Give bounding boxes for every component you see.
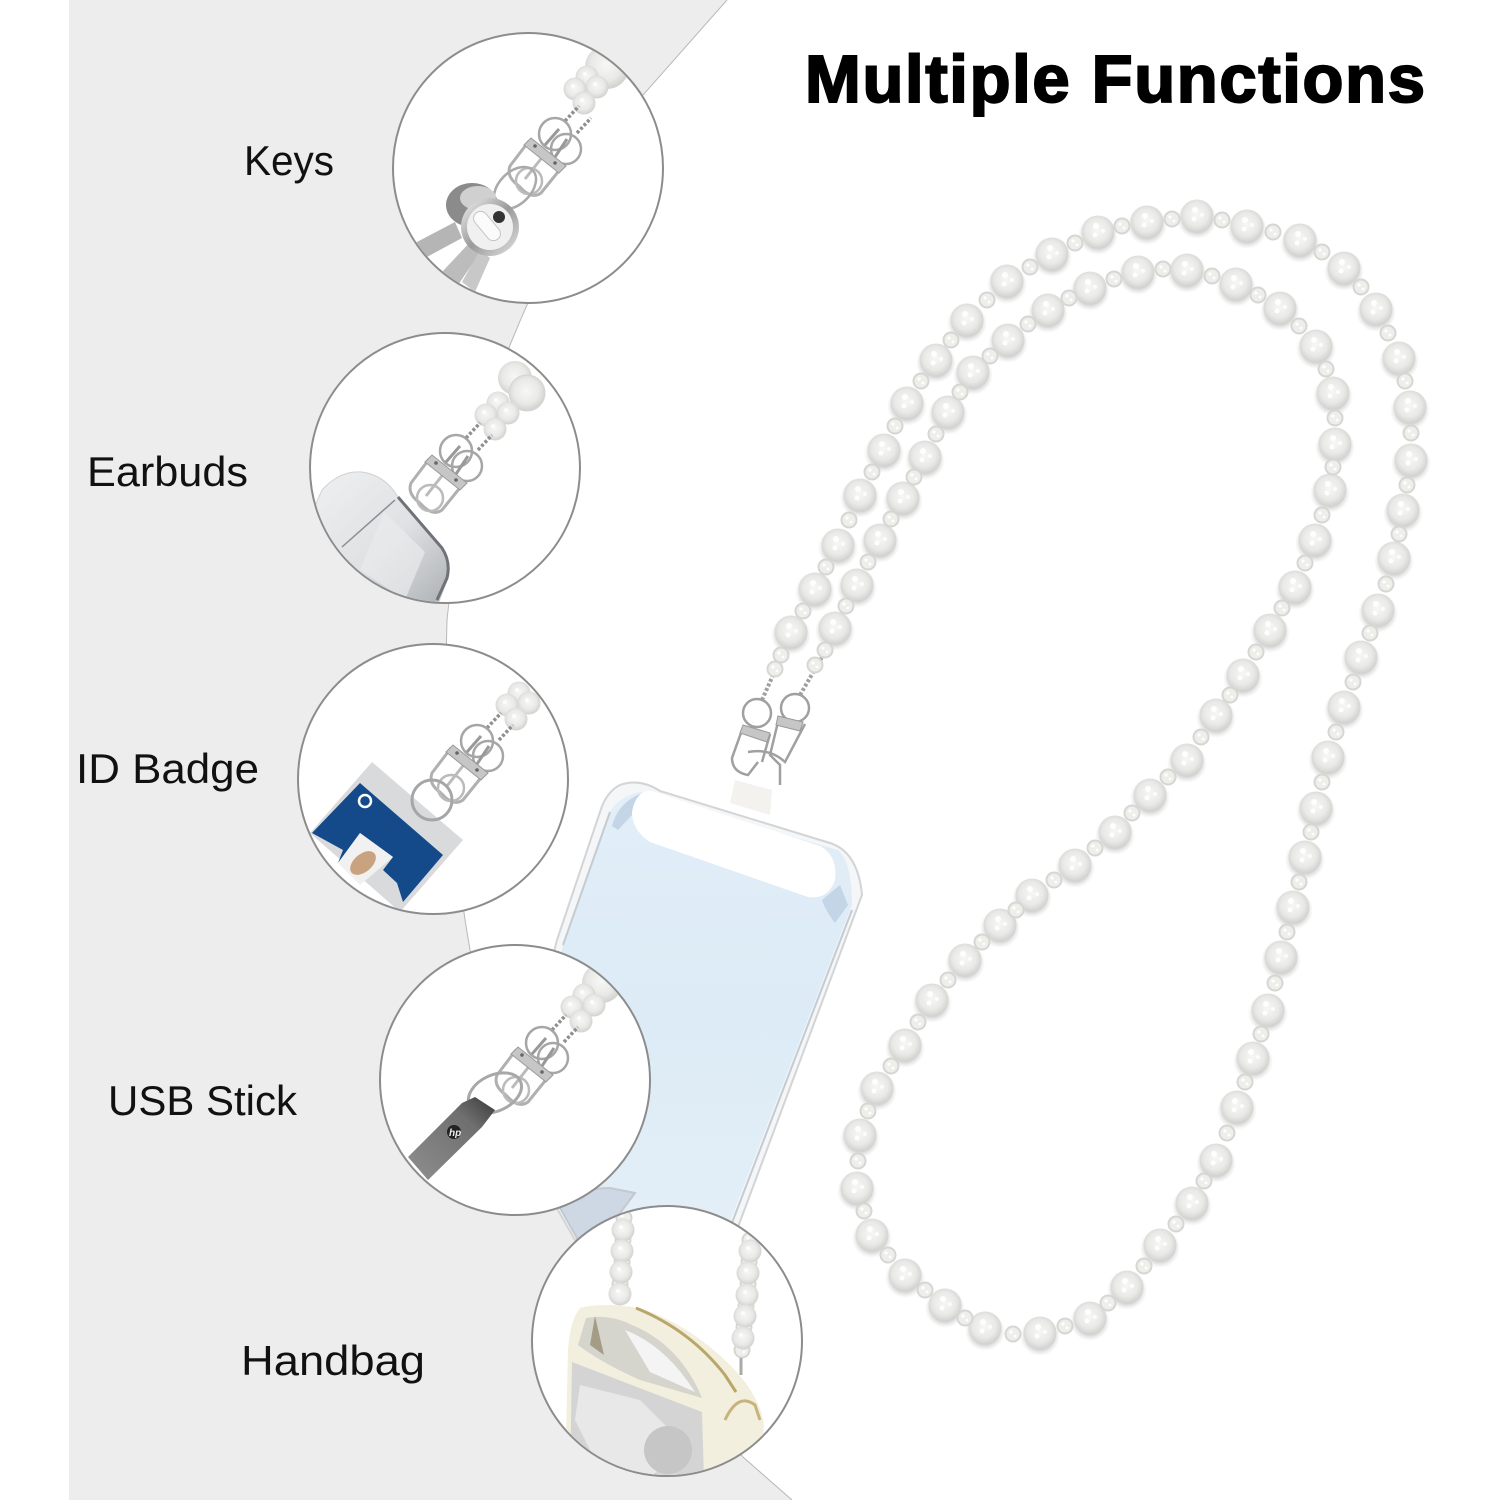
label: Keys: Keys — [244, 137, 334, 184]
icon: keys — [415, 183, 519, 292]
icon: USB stick — [408, 1097, 495, 1180]
circle: ID badge — [298, 644, 568, 914]
icon: USB stick: hp — [449, 1128, 461, 1139]
icon: earbuds case — [316, 471, 450, 602]
circle: keys — [393, 33, 663, 303]
metal swivel clasps on main strap — [732, 652, 825, 785]
circle: USB stick — [380, 945, 650, 1215]
phone tether tab — [730, 780, 772, 815]
phone in clear case — [520, 783, 862, 1240]
pearl strap: small spacer pearls — [766, 210, 1420, 1342]
pearl strap: large pearls — [771, 199, 1431, 1356]
label: Handbag: Handbag — [241, 1337, 425, 1384]
background: grey curved panel — [69, 0, 792, 1500]
label: USB Stick: USB Stick — [108, 1077, 298, 1124]
pearl shoulder strands — [608, 1210, 762, 1358]
label: ID Badge: ID Badge — [76, 745, 259, 792]
circle: earbuds — [300, 333, 580, 612]
title: Multiple Functions — [805, 42, 1425, 117]
circle: handbag — [532, 1206, 802, 1480]
icon: handbag — [565, 1305, 764, 1480]
phone white band — [632, 791, 835, 897]
icon: ID badge — [310, 762, 463, 912]
label: Earbuds: Earbuds — [87, 448, 248, 495]
